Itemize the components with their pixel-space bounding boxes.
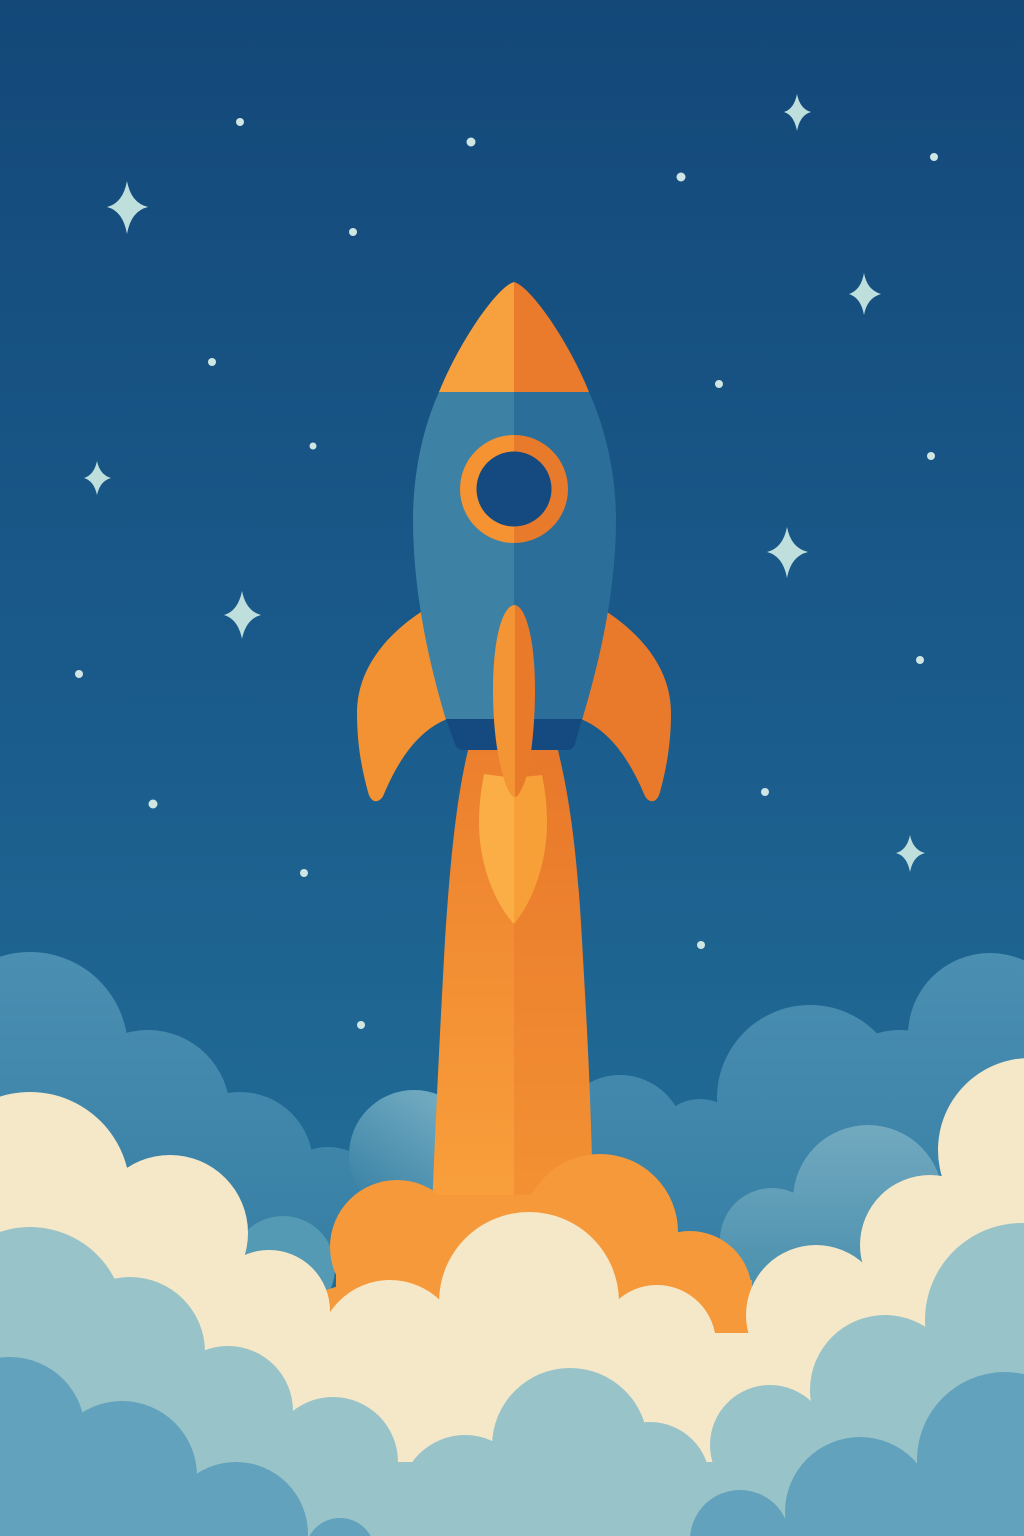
rocket exhaust flame — [432, 750, 593, 1210]
clouds: mid blue puff left of flame — [349, 1090, 479, 1220]
porthole — [460, 435, 568, 543]
center fin — [493, 605, 535, 797]
cream clouds — [0, 1058, 1024, 1483]
clouds: back blue layer — [0, 952, 1024, 1310]
stars: four-point sparkles — [84, 94, 925, 872]
rocket body — [413, 392, 616, 720]
right fin — [578, 610, 671, 801]
nose cone — [439, 282, 589, 392]
clouds: mid blue puffs right — [720, 1125, 943, 1292]
clouds: small blue puff left of exhaust — [231, 1216, 335, 1320]
stars: small dots — [75, 118, 938, 1029]
left fin — [357, 610, 450, 801]
light teal clouds — [0, 1223, 1024, 1536]
inner flame — [479, 774, 547, 924]
rocket — [357, 282, 671, 924]
engine base — [446, 719, 582, 750]
orange exhaust clouds — [326, 1154, 752, 1355]
foreground blue clouds — [0, 1357, 1024, 1536]
